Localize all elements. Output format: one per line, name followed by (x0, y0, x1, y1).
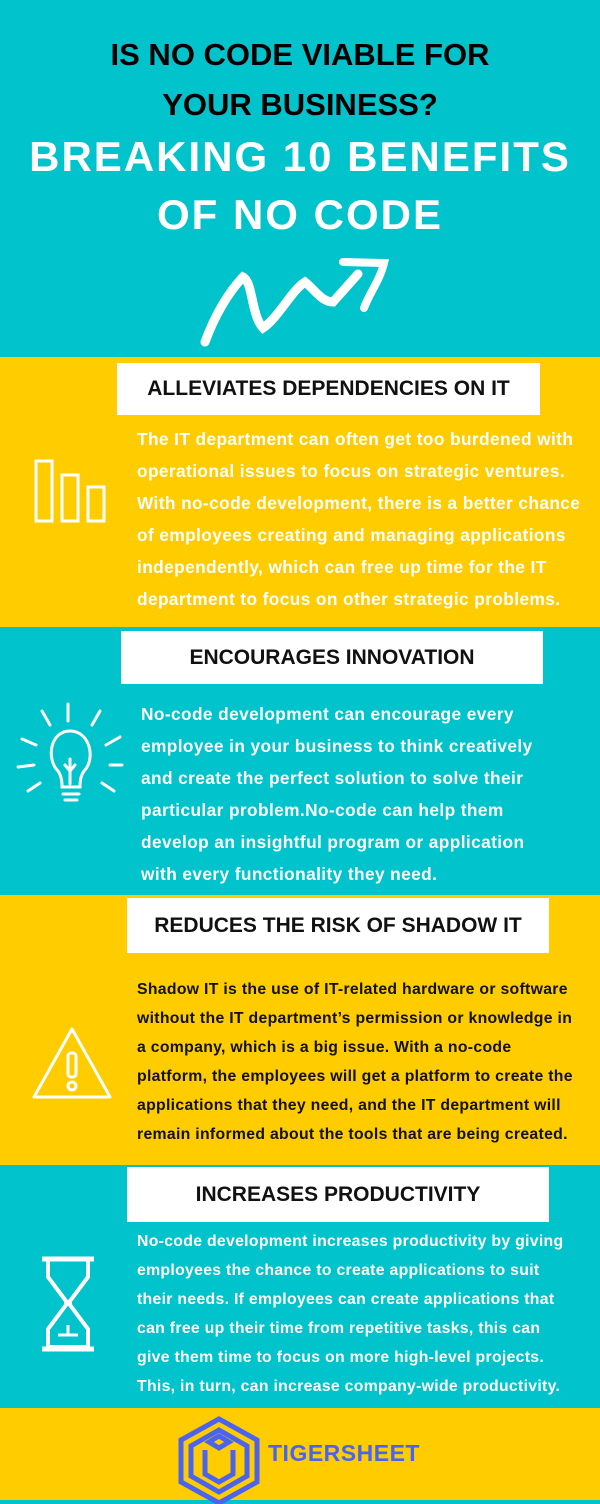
logo text: TIGERSHEET (268, 1440, 420, 1466)
body text: employees the chance to create applications to suit (137, 1262, 539, 1279)
panel: reduces shadow IT (0, 895, 600, 1165)
icon: lightbulb (16, 702, 124, 802)
body text: applications that they need, and the IT department will (137, 1097, 561, 1114)
panel: encourages innovation (0, 627, 600, 895)
icon: arrow up (200, 258, 389, 346)
body text: The IT department can often get too burdened with (137, 429, 573, 449)
body text: With no-code development, there is a better chance (137, 493, 580, 513)
body text: remain informed about the tools that are being created. (137, 1126, 568, 1143)
body text: platform, the employees will get a platform to create the (137, 1068, 573, 1085)
body text: and create the perfect solution to solve their (141, 768, 523, 788)
body text (137, 1233, 563, 1395)
heading: ALLEVIATES DEPENDENCIES ON IT (147, 377, 510, 400)
body text: employee in your business to think creatively (141, 736, 533, 756)
icon: bars (34, 460, 106, 522)
title main: BREAKING 10 BENEFITS (29, 133, 571, 180)
heading (117, 363, 540, 415)
body text: give them time to focus on more high-level projects. (137, 1349, 544, 1366)
logo icon (178, 1416, 260, 1504)
title question (111, 37, 489, 122)
body text: of employees creating and managing applications (137, 525, 566, 545)
heading: ENCOURAGES INNOVATION (189, 646, 475, 669)
title main: OF NO CODE (157, 191, 443, 238)
body text (137, 981, 573, 1143)
icon: warning (32, 1027, 112, 1098)
body text: can free up their time from repetitive tasks, this can (137, 1320, 540, 1337)
body text: a company, which is a big issue. With a no-code (137, 1039, 511, 1056)
panel: increases productivity (0, 1165, 600, 1408)
title question: IS NO CODE VIABLE FOR (111, 37, 489, 72)
body text (137, 429, 580, 609)
icon: hourglass (42, 1256, 94, 1352)
footer (0, 1408, 600, 1500)
body text: develop an insightful program or application (141, 832, 524, 852)
body text: department to focus on other strategic problems. (137, 589, 560, 609)
title main (29, 133, 571, 238)
body text: Shadow IT is the use of IT-related hardware or software (137, 981, 568, 998)
body text: This, in turn, can increase company-wide productivity. (137, 1378, 560, 1395)
body text: with every functionality they need. (141, 864, 437, 884)
body text: their needs. If employees can create applications that (137, 1291, 554, 1308)
body text: particular problem.No-code can help them (141, 800, 504, 820)
panel: alleviates dependencies (0, 357, 600, 627)
body text: independently, which can free up time for the IT (137, 557, 547, 577)
heading: REDUCES THE RISK OF SHADOW IT (154, 914, 522, 937)
body text: No-code development increases productivity by giving (137, 1233, 563, 1250)
header panel (0, 0, 600, 357)
heading: INCREASES PRODUCTIVITY (196, 1183, 480, 1206)
body text: No-code development can encourage every (141, 704, 514, 724)
heading (127, 1167, 549, 1222)
title question: YOUR BUSINESS? (162, 87, 438, 122)
body text (141, 704, 533, 884)
heading (127, 898, 549, 953)
heading (121, 631, 543, 684)
body text: operational issues to focus on strategic ventures. (137, 461, 565, 481)
body text: without the IT department’s permission or knowledge in (137, 1010, 572, 1027)
